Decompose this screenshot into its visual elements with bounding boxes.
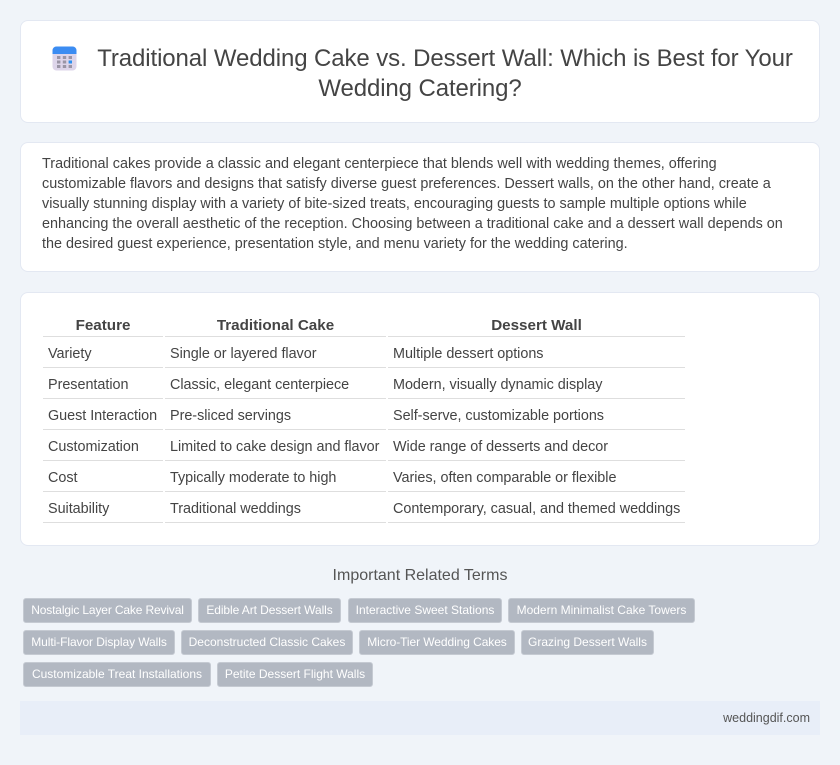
comparison table panel: Varies, often comparable or flexible [393, 470, 616, 486]
tag [508, 598, 695, 623]
tag: Multi-Flavor Display Walls [31, 635, 167, 649]
title: Traditional Wedding Cake vs. Dessert Wall: Which is Best for Your [97, 45, 793, 72]
tag: Micro-Tier Wedding Cakes [367, 635, 507, 649]
title: Wedding Catering? [318, 75, 522, 102]
header panel [20, 20, 820, 123]
comparison table panel: Limited to cake design and flavor [170, 439, 379, 455]
intro text panel [20, 142, 820, 272]
table header: feature: Feature [76, 317, 130, 334]
title [97, 45, 793, 102]
comparison table panel: Typically moderate to high [170, 470, 336, 486]
intro paragraph: the desired guest experience, presentation style, and menu variety for the wedding catering. [42, 236, 628, 252]
row: suitability: Suitability [48, 501, 109, 517]
intro paragraph [42, 156, 783, 252]
tag: Nostalgic Layer Cake Revival [31, 603, 184, 617]
comparison table panel: Single or layered flavor [170, 346, 316, 362]
comparison table panel [20, 292, 820, 546]
tag [348, 598, 502, 623]
intro paragraph: Traditional cakes provide a classic and elegant centerpiece that blends well with wedding themes, offering [42, 156, 717, 172]
tag [181, 630, 353, 655]
row: customization: Customization [48, 439, 139, 455]
comparison table panel: Wide range of desserts and decor [393, 439, 608, 455]
tag: Grazing Dessert Walls [528, 635, 647, 649]
tag [217, 662, 373, 687]
intro paragraph: visually stunning display with a variety of bite-sized treats, encouraging guests to sample multiple options while [42, 196, 747, 212]
table header: dessert wall: Dessert Wall [491, 317, 582, 334]
icon: calendar [52, 46, 76, 70]
tag [359, 630, 515, 655]
row: variety: Variety [48, 346, 92, 362]
row: cost: Cost [48, 470, 77, 486]
tag [23, 630, 175, 655]
tag [198, 598, 341, 623]
intro paragraph: customizable flavors and designs that satisfy diverse guest preferences. Dessert walls, on the other hand, create a [42, 176, 771, 192]
tag: Modern Minimalist Cake Towers [517, 603, 686, 617]
comparison table panel: Pre-sliced servings [170, 408, 291, 424]
footer source link: weddingdif.com [723, 711, 810, 725]
table header: traditional cake: Traditional Cake [217, 317, 334, 334]
tag: Edible Art Dessert Walls [206, 603, 333, 617]
row: presentation: Presentation [48, 377, 128, 393]
footer bar [20, 701, 820, 735]
row: guest interaction: Guest Interaction [48, 408, 157, 424]
related term tags [23, 598, 695, 687]
tag [23, 662, 211, 687]
comparison table panel: Contemporary, casual, and themed weddings [393, 501, 680, 517]
comparison table panel: Traditional weddings [170, 501, 301, 517]
comparison table panel: Modern, visually dynamic display [393, 377, 602, 393]
intro paragraph: enhancing the overall aesthetic of the reception. Choosing between a traditional cake and a dessert wall depends on [42, 216, 783, 232]
tag [23, 598, 192, 623]
tag [521, 630, 654, 655]
comparison table panel: Self-serve, customizable portions [393, 408, 604, 424]
tag: Deconstructed Classic Cakes [189, 635, 345, 649]
comparison table panel: Multiple dessert options [393, 346, 543, 362]
tag: Petite Dessert Flight Walls [225, 667, 365, 681]
comparison table panel: Classic, elegant centerpiece [170, 377, 349, 393]
tag: Interactive Sweet Stations [356, 603, 494, 617]
related terms heading: Important Related Terms [333, 567, 507, 584]
tag: Customizable Treat Installations [32, 667, 202, 681]
